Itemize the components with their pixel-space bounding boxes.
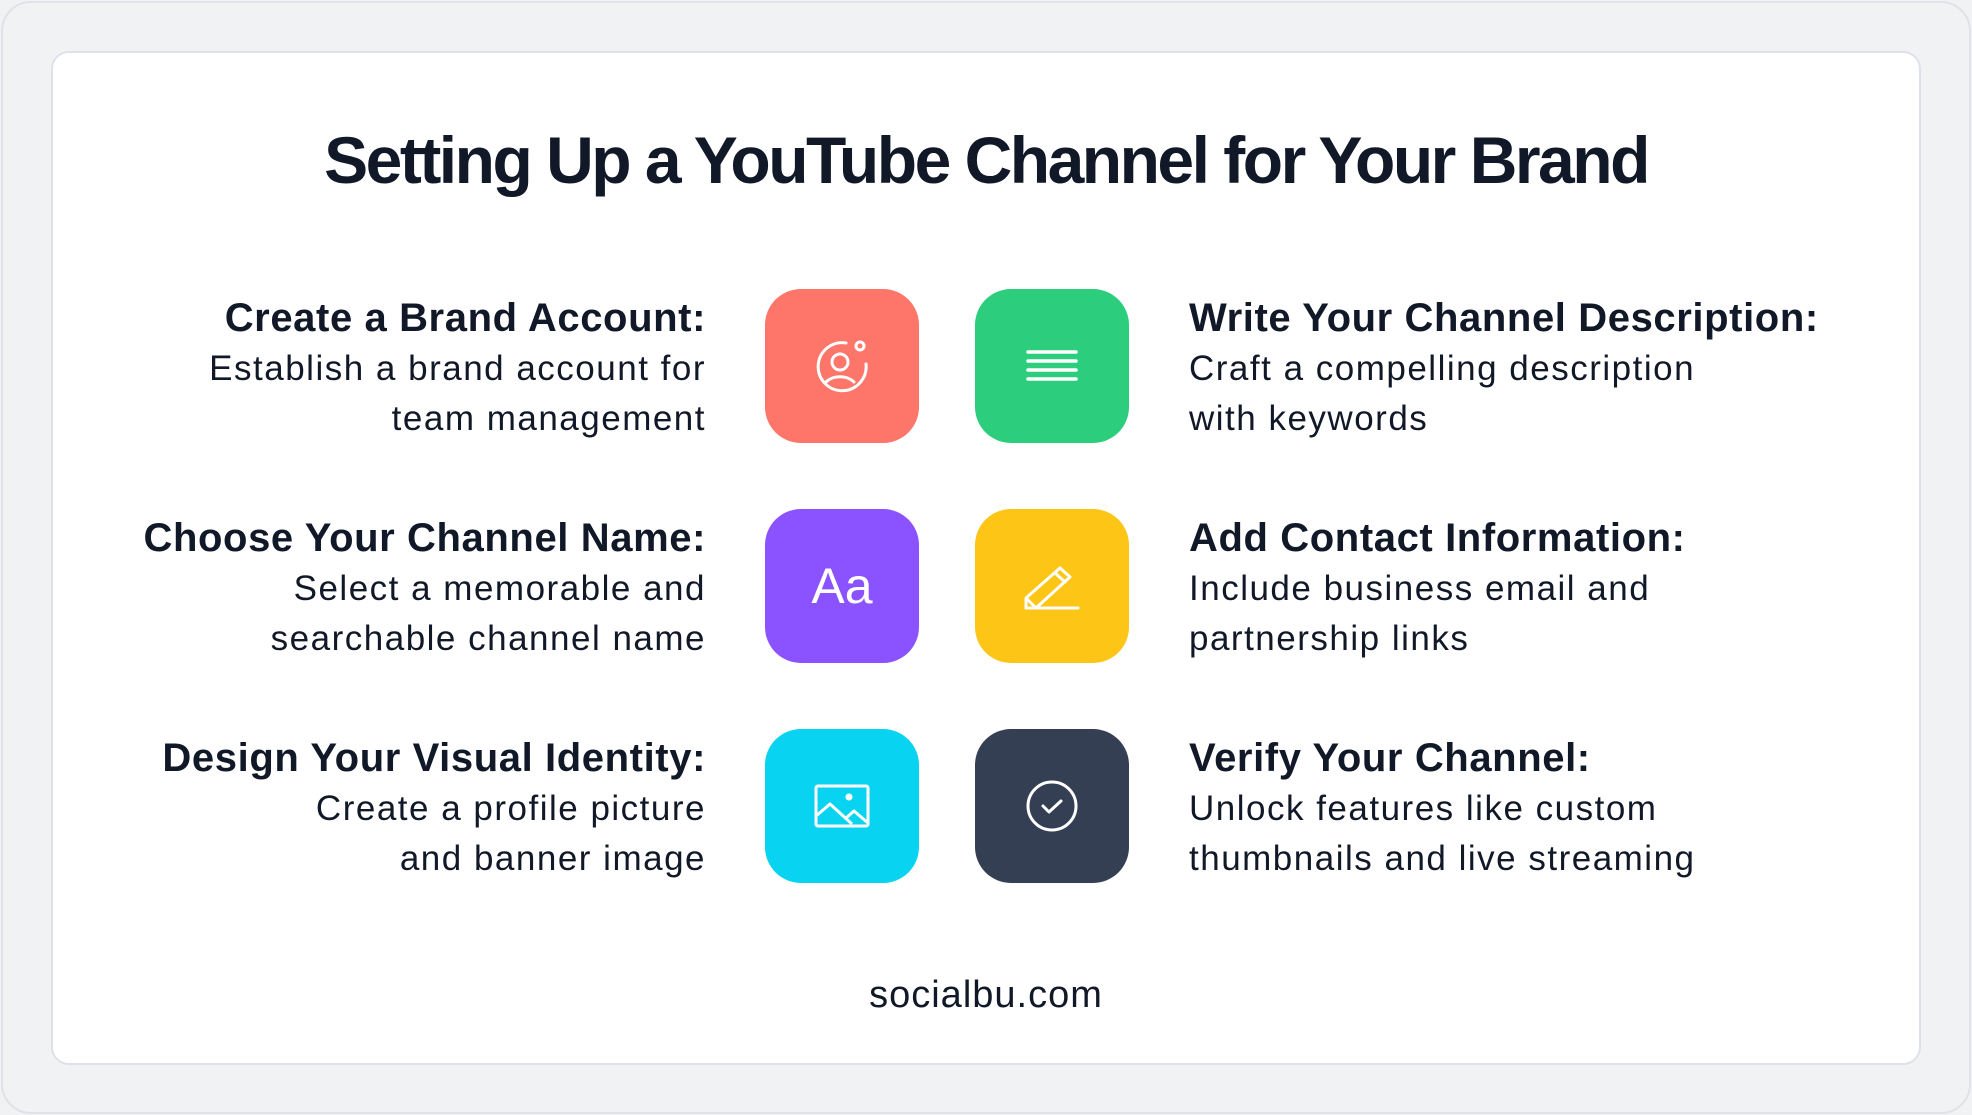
icon: typography Aa	[765, 509, 919, 663]
step: verify channel	[1189, 736, 1696, 878]
step: verify channel: Verify Your Channel:	[1189, 736, 1591, 780]
step: add contact info: partnership links	[1189, 619, 1469, 658]
step: create brand account: team management	[392, 399, 706, 438]
icon: typography Aa: Aa	[811, 558, 873, 614]
step: choose channel name: Choose Your Channel Name:	[144, 516, 706, 560]
step: write channel description: Craft a compelling description	[1189, 349, 1695, 388]
step: choose channel name: Select a memorable and	[294, 569, 706, 608]
step: create brand account: Establish a brand account for	[209, 349, 706, 388]
step: write channel description: Write Your Channel Description:	[1189, 296, 1819, 340]
icon: pencil	[975, 509, 1129, 663]
icon: check circle	[975, 729, 1129, 883]
step: choose channel name	[144, 516, 706, 658]
step: create brand account	[209, 296, 706, 438]
step: create brand account: Create a Brand Account:	[225, 296, 706, 340]
icon: text lines	[975, 289, 1129, 443]
icon: user settings	[765, 289, 919, 443]
step: add contact info: Include business email and	[1189, 569, 1650, 608]
step: write channel description	[1189, 296, 1819, 438]
step: add contact info: Add Contact Information:	[1189, 516, 1686, 560]
step: design visual identity: and banner image	[400, 839, 706, 878]
step: write channel description: with keywords	[1189, 399, 1428, 438]
step: add contact info	[1189, 516, 1686, 658]
footer: socialbu.com	[869, 974, 1103, 1016]
step: design visual identity: Create a profile picture	[316, 789, 706, 828]
step: verify channel: Unlock features like custom	[1189, 789, 1657, 828]
icon: image	[765, 729, 919, 883]
step: verify channel: thumbnails and live streaming	[1189, 839, 1696, 878]
step: design visual identity: Design Your Visual Identity:	[162, 736, 706, 780]
step: choose channel name: searchable channel name	[271, 619, 706, 658]
step: design visual identity	[162, 736, 706, 878]
title: Setting Up a YouTube Channel for Your Brand	[324, 123, 1648, 197]
